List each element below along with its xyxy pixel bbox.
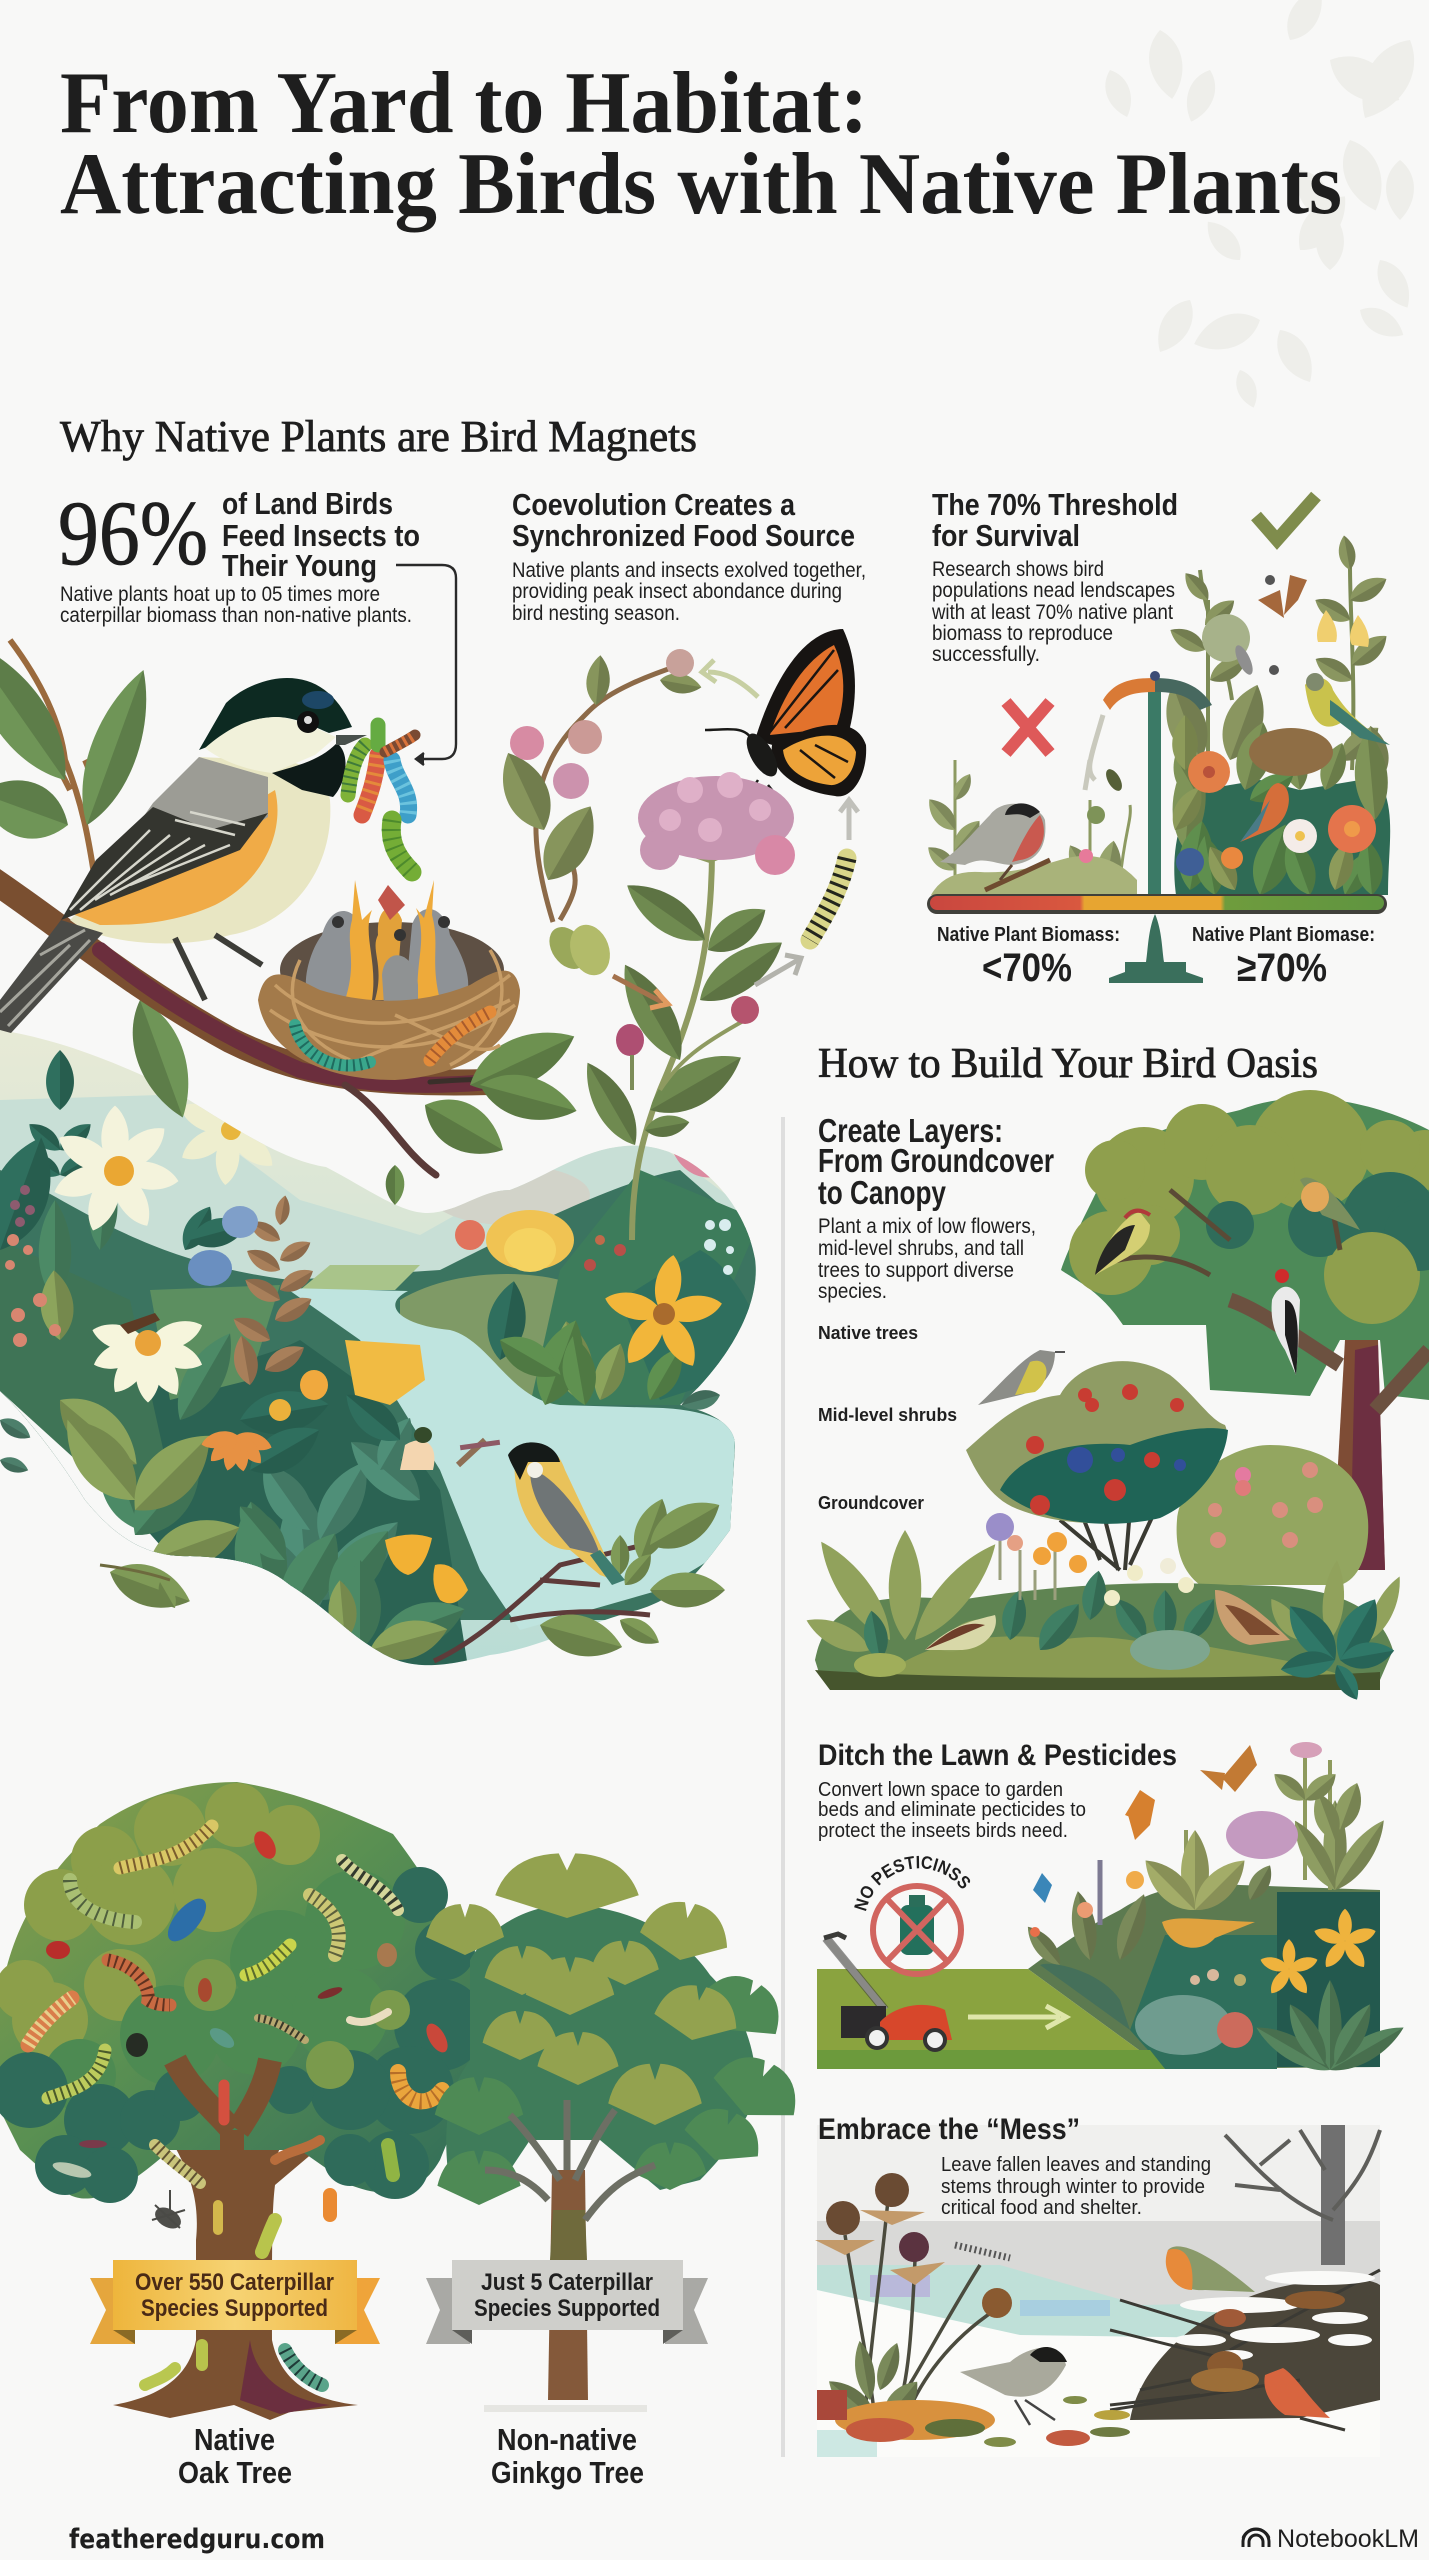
lifecycle arrows xyxy=(613,660,858,1008)
panel: coevolution text: bird nesting season. xyxy=(512,602,680,625)
text: ditch the lawn: Convert lown space to garden xyxy=(818,1779,1063,1801)
fallen leaves xyxy=(817,2390,1130,2447)
icon: monarch butterfly xyxy=(705,629,866,800)
pink shrub xyxy=(1177,1445,1368,1585)
ground birds xyxy=(925,1590,1290,1650)
nest caterpillars xyxy=(295,1012,490,1066)
panel: 70 percent threshold text: The 70% Threshold xyxy=(932,487,1178,522)
scale labels xyxy=(937,924,1375,990)
banner: oak caterpillar count: Species Supported xyxy=(141,2295,328,2322)
illustration: winter scene xyxy=(815,2125,1380,2457)
main chickadee bird xyxy=(0,678,367,1033)
icon: chrysalis xyxy=(542,919,617,981)
white arrow xyxy=(968,2006,1066,2028)
illustration: left sprig with buds xyxy=(489,649,703,922)
stat body: caterpillar biomass than non-native plants. xyxy=(60,604,412,627)
banner: oak caterpillar count: Over 550 Caterpillar xyxy=(135,2269,334,2296)
berry shrub xyxy=(966,1361,1228,1524)
caterpillars in beak xyxy=(348,725,415,872)
text: create layers: From Groundcover xyxy=(818,1142,1054,1179)
text: create layers: Plant a mix of low flowers, xyxy=(818,1215,1036,1238)
panel: 70 percent threshold text: Research shows bird xyxy=(932,558,1104,581)
banner: ginkgo caterpillar count: Species Supported xyxy=(474,2295,660,2322)
scale labels: <70% xyxy=(982,946,1072,990)
title xyxy=(60,55,1342,233)
ginkgo canopy xyxy=(426,1853,809,2205)
text: embrace the mess: Embrace the “Mess” xyxy=(818,2113,1080,2146)
illustration: native oak tree xyxy=(0,1782,490,2420)
column divider xyxy=(781,1117,785,2457)
lawn xyxy=(817,1969,1165,2069)
stat heading xyxy=(222,486,420,583)
ground bed xyxy=(815,1583,1393,1686)
daisy flowers xyxy=(54,1104,272,1402)
illustration: scale plants right xyxy=(1155,534,1393,901)
panel: 96 percent stat xyxy=(58,482,420,627)
text: create layers: Native trees xyxy=(818,1323,918,1343)
text: create layers: trees to support diverse xyxy=(818,1259,1014,1282)
text: create layers: species. xyxy=(818,1280,887,1303)
footer: website: featheredguru.com xyxy=(69,2524,325,2555)
text: create layers: Mid-level shrubs xyxy=(818,1405,957,1425)
text: embrace the mess: stems through winter to provide xyxy=(941,2176,1205,2198)
illustration: ginkgo tree xyxy=(426,1853,809,2412)
bird yellow xyxy=(1305,673,1390,745)
small butterfly xyxy=(1258,575,1307,618)
seedheads xyxy=(815,2173,1012,2429)
footer: notebooklm logo: NotebookLM xyxy=(1277,2525,1419,2553)
icon: red x mark xyxy=(1006,702,1050,753)
oak trunk xyxy=(113,2100,358,2420)
stat number: 96% xyxy=(58,482,208,584)
title: From Yard to Habitat: xyxy=(60,55,868,152)
branch main xyxy=(0,878,510,1175)
decorative faint foliage top right xyxy=(1099,0,1428,411)
panel: coevolution text: Native plants and insects exolved together, xyxy=(512,559,866,582)
label: oak tree xyxy=(178,2422,292,2490)
icon: check mark xyxy=(1256,496,1316,540)
small chickadee in meadow xyxy=(508,1442,625,1585)
yellow flowers xyxy=(199,1136,738,1603)
flowers right xyxy=(1176,751,1376,876)
stat body xyxy=(60,583,412,627)
no pesticides sign xyxy=(854,1856,970,1977)
text: ditch the lawn: protect the inseets birds need. xyxy=(818,1820,1068,1842)
bird orange xyxy=(1240,783,1289,842)
nest with chicks xyxy=(258,880,520,1080)
label: ginkgo tree: Ginkgo Tree xyxy=(491,2455,644,2490)
illustration: layered garden tree xyxy=(1061,1090,1429,1570)
winter birds xyxy=(960,2246,1330,2425)
text: create layers: Groundcover xyxy=(818,1493,924,1513)
brush pile xyxy=(1110,2270,1380,2430)
illustration: shrubs and groundcover xyxy=(802,1350,1408,1704)
chickadee on scale xyxy=(940,803,1050,890)
text: ditch the lawn: Ditch the Lawn & Pesticides xyxy=(818,1739,1177,1772)
panel: 70 percent threshold text: populations nead lendscapes xyxy=(932,579,1175,602)
no pesticides sign: NO PESTICINSS xyxy=(854,1856,970,1911)
illustration: twig and leaves outside meadow xyxy=(0,1386,729,1666)
insects on oak xyxy=(28,1826,442,2385)
garden flowers xyxy=(986,1513,1194,1606)
berries and blue blooms xyxy=(5,1185,734,1347)
ferns xyxy=(802,1530,1408,1661)
icon: monarch caterpillar xyxy=(810,858,847,940)
oak limbs xyxy=(175,2060,270,2240)
label: ginkgo tree: Non-native xyxy=(497,2422,637,2457)
title: Attracting Birds with Native Plants xyxy=(60,136,1342,233)
illustration: scale plants left xyxy=(922,715,1137,895)
shrub bird xyxy=(978,1350,1065,1405)
text: create layers xyxy=(818,1112,1054,1513)
panel: 70 percent threshold text: with at least 70% native plant xyxy=(931,601,1173,624)
panel: coevolution text xyxy=(512,487,866,625)
ginkgo trunk xyxy=(548,2170,588,2400)
section heading: why native plants: Why Native Plants are Bird Magnets xyxy=(60,412,697,461)
illustration: left branch leaves xyxy=(0,625,205,1125)
stat heading: Feed Insects to xyxy=(222,518,420,553)
text: ditch the lawn: beds and eliminate pecticides to xyxy=(818,1799,1086,1821)
bare tree xyxy=(1225,2125,1380,2265)
ginkgo limbs xyxy=(485,2100,655,2220)
scale labels: Native Plant Biomase: xyxy=(1192,924,1375,946)
garden bird xyxy=(1162,1918,1255,1948)
lawn mower xyxy=(824,1934,952,2050)
text: ditch the lawn xyxy=(818,1739,1177,1842)
butterflies xyxy=(1033,1745,1257,1903)
label: ginkgo tree xyxy=(491,2422,644,2490)
text: embrace the mess: critical food and shelter. xyxy=(941,2197,1142,2219)
illustration: lawn to garden xyxy=(817,1742,1404,2070)
text: create layers: mid-level shrubs, and tall xyxy=(818,1237,1024,1260)
river xyxy=(286,1288,735,1630)
banner: ginkgo caterpillar count: Just 5 Caterpillar xyxy=(481,2269,653,2296)
scale labels: Native Plant Biomass: xyxy=(937,924,1120,946)
chicks xyxy=(306,880,468,1005)
oak canopy xyxy=(0,1782,490,2203)
scale labels: ≥70% xyxy=(1237,946,1327,990)
banner: ginkgo caterpillar count xyxy=(426,2260,708,2344)
panel: 70 percent threshold text: for Survival xyxy=(932,518,1080,553)
arrow: stat to caterpillars xyxy=(396,565,456,765)
stat heading: Their Young xyxy=(222,548,377,583)
text: embrace the mess: Leave fallen leaves and standing xyxy=(941,2154,1211,2176)
nest small xyxy=(1249,728,1333,776)
leaves near nest xyxy=(386,1015,584,1205)
illustration: meadow blob xyxy=(0,1020,780,1680)
panel: coevolution text: providing peak insect abondance during xyxy=(512,580,842,603)
label: oak tree: Oak Tree xyxy=(178,2455,292,2490)
stat body: Native plants hoat up to 05 times more xyxy=(60,583,380,606)
banner: oak caterpillar count xyxy=(90,2260,380,2344)
text: embrace the mess xyxy=(818,2113,1211,2219)
panel: 70 percent threshold text xyxy=(931,487,1178,666)
illustration: milkweed plant xyxy=(573,772,795,1240)
panel: 70 percent threshold text: successfully. xyxy=(932,643,1040,666)
garden birds xyxy=(1095,1177,1360,1375)
scale instrument xyxy=(927,671,1387,983)
panel: 70 percent threshold text: biomass to reproduce xyxy=(932,622,1113,645)
panel: coevolution text: Synchronized Food Source xyxy=(512,518,855,553)
stat heading: of Land Birds xyxy=(222,486,393,521)
text: create layers: Create Layers: xyxy=(818,1112,1003,1149)
garden bed xyxy=(1021,1742,1409,2080)
section heading: bird oasis: How to Build Your Bird Oasis xyxy=(818,1041,1318,1087)
panel: coevolution text: Coevolution Creates a xyxy=(512,487,796,522)
text: create layers: to Canopy xyxy=(818,1174,947,1211)
label: oak tree: Native xyxy=(194,2422,275,2457)
